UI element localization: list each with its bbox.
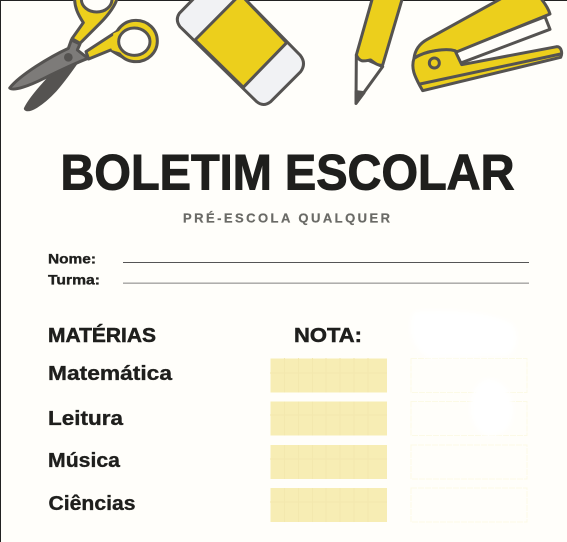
- subject list: Música: [48, 450, 121, 472]
- subject list: Leitura: [48, 408, 124, 430]
- icon: eraser: [177, 0, 304, 104]
- subject list: Ciências: [48, 493, 136, 515]
- subject list: Matemática: [48, 363, 173, 385]
- title: BOLETIM ESCOLAR: [60, 144, 514, 200]
- faint empty boxes: [411, 358, 527, 522]
- name field: Nome:: [48, 252, 96, 266]
- white blotches: [411, 310, 517, 436]
- subjects heading: MATÉRIAS: [48, 324, 156, 347]
- grade boxes: [270, 358, 388, 522]
- icon: scissors: [10, 0, 157, 110]
- icon: stapler: [413, 0, 562, 91]
- grade heading: NOTA:: [294, 325, 362, 347]
- subject list: [48, 363, 173, 515]
- icon: pencil: [356, 0, 403, 103]
- subtitle: PRÉ-ESCOLA QUALQUER: [183, 210, 391, 226]
- class field: Turma:: [48, 272, 100, 288]
